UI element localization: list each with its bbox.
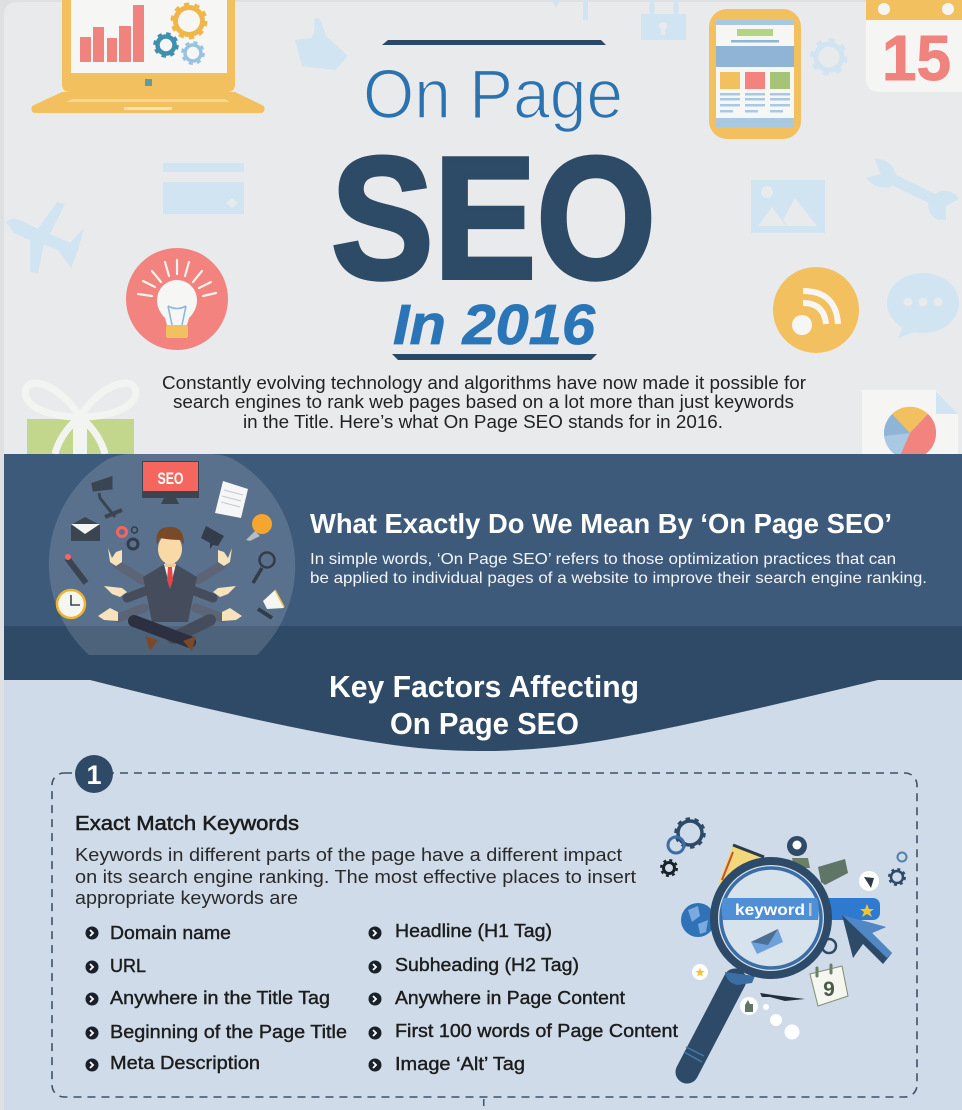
panel: key factors background — [4, 680, 962, 1110]
factor description: Keywords in different parts of the page have a different impact — [75, 844, 622, 865]
icon: orange bulb — [246, 514, 272, 541]
icon: folder — [818, 859, 848, 885]
factor description: appropriate keywords are — [75, 887, 298, 908]
title: In 2016: In 2016 — [393, 293, 595, 357]
icon: plane — [6, 202, 84, 273]
panel: hero background — [4, 2, 962, 456]
icon: credit card — [163, 163, 244, 214]
icon: thumbs up — [295, 18, 348, 70]
factor description: on its search engine ranking. The most effective places to insert — [75, 866, 636, 887]
thumb badge — [740, 997, 758, 1015]
icon: heart pin — [787, 836, 810, 868]
banner: key factors — [90, 669, 878, 751]
connector tick — [483, 1099, 484, 1106]
factor description — [75, 844, 636, 908]
bullet list: right column — [368, 920, 678, 1074]
paint brush — [760, 993, 805, 1001]
title: On Page: On Page — [363, 55, 623, 133]
icon: megaphone — [258, 590, 284, 618]
illustration: businessman multitasking — [49, 454, 295, 655]
definition text: be applied to individual pages of a website to improve their search engine ranking. — [310, 570, 927, 587]
icon: magnifier — [253, 552, 274, 583]
panel: definition band — [4, 454, 962, 681]
heading: exact match keywords: Exact Match Keywords — [75, 813, 299, 835]
definition text — [310, 551, 927, 587]
icon: laptop — [32, 0, 264, 113]
icon: speech bubble — [201, 526, 224, 549]
icon: wrench — [866, 158, 959, 220]
search bar — [723, 898, 880, 920]
icon: calendar: 15 — [882, 22, 951, 94]
bullet list: right column: Image ‘Alt’ Tag — [395, 1053, 525, 1074]
intro paragraph: in the Title. Here’s what On Page SEO stands for in 2016. — [243, 412, 723, 432]
bullet list: right column: First 100 words of Page Content — [395, 1020, 678, 1041]
badge: number 1: 1 — [86, 760, 102, 790]
icon: pointer badge — [859, 871, 879, 891]
banner: key factors: On Page SEO — [390, 706, 579, 741]
cursor arrow — [842, 915, 892, 964]
star — [860, 904, 874, 917]
panel: factor 1 dashed box — [52, 773, 917, 1097]
bullet list: right column: Subheading (H2 Tag) — [395, 954, 579, 975]
illustration: keyword magnifier — [661, 818, 906, 1072]
definition text: In simple words, ‘On Page SEO’ refers to those optimization practices that can — [310, 551, 896, 568]
handle — [684, 972, 755, 1072]
icon: gears left — [661, 818, 704, 876]
icon: clock — [57, 590, 85, 618]
intro paragraph — [162, 373, 806, 432]
icon: document — [215, 481, 248, 518]
badge: number 1 — [75, 755, 113, 793]
icon: desk lamp — [93, 478, 122, 517]
icon: gears right — [889, 852, 906, 885]
bubbles — [763, 1004, 800, 1040]
icon: envelope — [71, 517, 100, 541]
icon: top pin hint — [552, 0, 588, 20]
lens: keyword — [735, 902, 805, 919]
title: top rule — [382, 40, 606, 45]
calendar nine: 9 — [823, 978, 835, 1001]
bullet list: left column — [86, 922, 347, 1073]
title: SEO: SEO — [331, 120, 656, 315]
star badge — [692, 964, 708, 980]
icon: pale gear — [812, 40, 846, 74]
icon: pencil — [65, 554, 86, 583]
icon: globe — [681, 903, 715, 937]
icon: notebook — [718, 845, 764, 895]
icon: rss — [773, 267, 859, 353]
bullet list: left column: Domain name — [110, 922, 231, 943]
icon: gears — [118, 527, 138, 549]
heading: what exactly: What Exactly Do We Mean By ‘On Page SEO’ — [310, 508, 892, 539]
bullet list: left column: URL — [110, 955, 146, 976]
calendar nine — [810, 965, 848, 1006]
icon: gift box — [25, 383, 136, 454]
icon: SEO monitor — [142, 461, 199, 504]
intro paragraph: search engines to rank web pages based on a lot more than just keywords — [173, 392, 794, 412]
bullet list: left column: Anywhere in the Title Tag — [110, 987, 330, 1008]
person — [98, 527, 242, 651]
icon: SEO monitor: SEO — [158, 469, 184, 488]
bullet list: left column: Beginning of the Page Title — [110, 1021, 347, 1042]
banner: key factors: Key Factors Affecting — [329, 669, 639, 704]
lens — [714, 861, 828, 975]
bullet list: right column: Headline (H1 Tag) — [395, 920, 552, 941]
icon: picture — [751, 180, 825, 233]
icon: pie chart document — [862, 390, 958, 459]
title: bottom rule — [392, 354, 597, 360]
intro paragraph: Constantly evolving technology and algorithms have now made it possible for — [162, 373, 806, 393]
icon: light bulb — [126, 248, 228, 350]
icon: chat bubble — [887, 273, 959, 338]
icon: padlock — [641, 0, 686, 40]
icon: calendar — [866, 0, 962, 94]
partial gear below lens — [822, 939, 836, 953]
bullet list: left column: Meta Description — [110, 1052, 260, 1073]
bullet list: right column: Anywhere in Page Content — [395, 987, 625, 1008]
icon: tablet web page — [709, 9, 801, 139]
